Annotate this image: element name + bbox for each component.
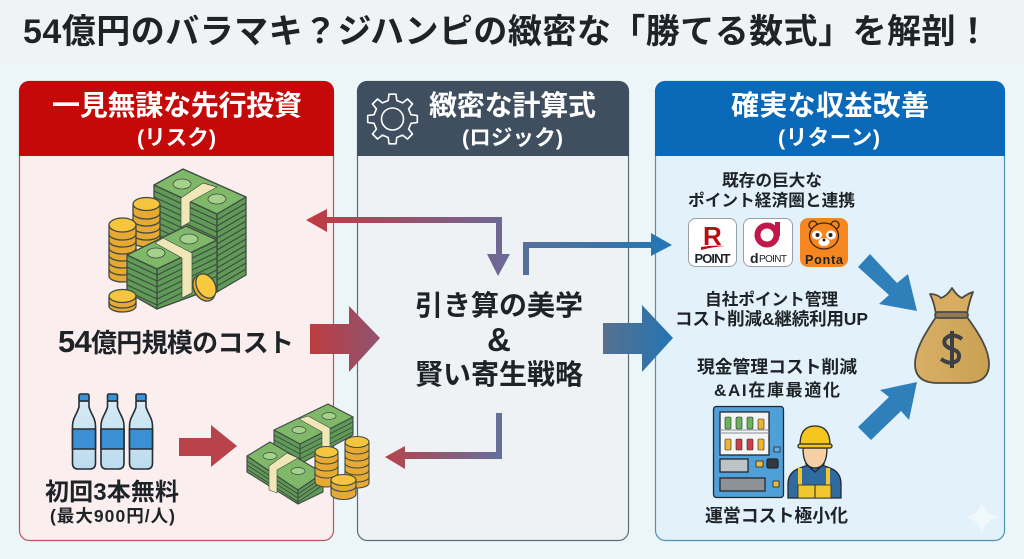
panel: return (655, 81, 1005, 540)
icon: d POINT: d (750, 250, 759, 266)
risk subheading: (リスク) (137, 126, 216, 150)
management line 1: 自社ポイント管理 (705, 289, 838, 309)
upper drinks (725, 417, 764, 429)
return subheading: (リターン) (778, 126, 880, 150)
icon: d POINT: POINT (759, 254, 787, 265)
arrow: logic to points (523, 233, 672, 275)
bottle 3 (130, 394, 152, 469)
points line 2: ポイント経済圏と連携 (688, 190, 855, 210)
icon: three water bottles (72, 394, 152, 469)
return panel header (655, 81, 1005, 156)
cash line 1: 現金管理コスト削減 (697, 356, 857, 377)
icon: R POINT: R (703, 221, 722, 251)
return heading: 確実な収益改善 (731, 90, 929, 121)
icon: R POINT (688, 218, 736, 266)
icon: money bag (915, 288, 989, 383)
small coins right (345, 436, 369, 488)
logic heading: 緻密な計算式 (429, 90, 596, 121)
icon: worker (788, 426, 841, 498)
sparkle (965, 501, 999, 535)
small coin stack (109, 290, 136, 312)
banknote stack front (127, 226, 217, 309)
icon: R POINT: POINT (694, 251, 731, 266)
risk panel header (19, 81, 334, 156)
coin stack back (133, 198, 160, 247)
free bottles limit note: (最大900円/人) (50, 506, 175, 526)
icon: gear (368, 94, 417, 144)
panel: logic (357, 81, 629, 540)
arrow: bottles to money (179, 425, 237, 467)
bottle 1 (72, 394, 96, 469)
coin stack left (109, 218, 136, 282)
lower drinks (725, 439, 764, 450)
bottle 2 (101, 394, 124, 469)
cash line 2: &AI在庫最適化 (714, 380, 840, 400)
icon: Ponta (800, 218, 848, 267)
arrow: points to money bag (858, 254, 917, 311)
single coin (188, 270, 220, 305)
worker caption: 運営コスト極小化 (705, 506, 848, 526)
points line 1: 既存の巨大な (722, 170, 822, 190)
logic panel body (358, 82, 628, 540)
ampersand: & (487, 321, 511, 358)
arrow: cost to strategy (310, 306, 380, 372)
return panel body (656, 82, 1004, 540)
icon: vending machine (714, 406, 784, 498)
small banknote stack back (274, 404, 353, 464)
banknote stack back (154, 169, 246, 292)
strategy line 1: 引き算の美学 (415, 290, 583, 321)
risk heading: 一見無謀な先行投資 (52, 90, 302, 121)
logic subheading: (ロジック) (462, 126, 563, 150)
small coins middle (315, 446, 338, 487)
icon: big money pile (109, 169, 246, 312)
arrow: cost to money bag (858, 382, 917, 440)
small coins front (331, 474, 356, 500)
icon: small money pile (247, 404, 369, 504)
icon: d POINT (744, 218, 792, 266)
icon: Ponta: Ponta (805, 253, 844, 267)
risk panel body (20, 82, 334, 540)
own point management text (675, 289, 868, 329)
arrow: two way cost and logic (306, 209, 510, 276)
management line 2: コスト削減&継続利用UP (675, 309, 868, 329)
arrow: strategy to returns (603, 305, 673, 372)
panel: risk (19, 81, 334, 540)
arrow: logic to small money (385, 413, 502, 469)
central strategy text (415, 290, 583, 390)
points text (688, 170, 855, 210)
free bottles label: 初回3本無料 (45, 479, 179, 506)
title: 54億円のバラマキ？ジハンピの緻密な「勝てる数式」を解剖！ (23, 13, 990, 51)
small banknote stack front (247, 442, 323, 504)
cost label: 54億円規模のコスト (58, 324, 294, 359)
cash management text (697, 356, 857, 400)
strategy line 2: 賢い寄生戦略 (415, 359, 583, 390)
logic panel header (357, 81, 629, 156)
